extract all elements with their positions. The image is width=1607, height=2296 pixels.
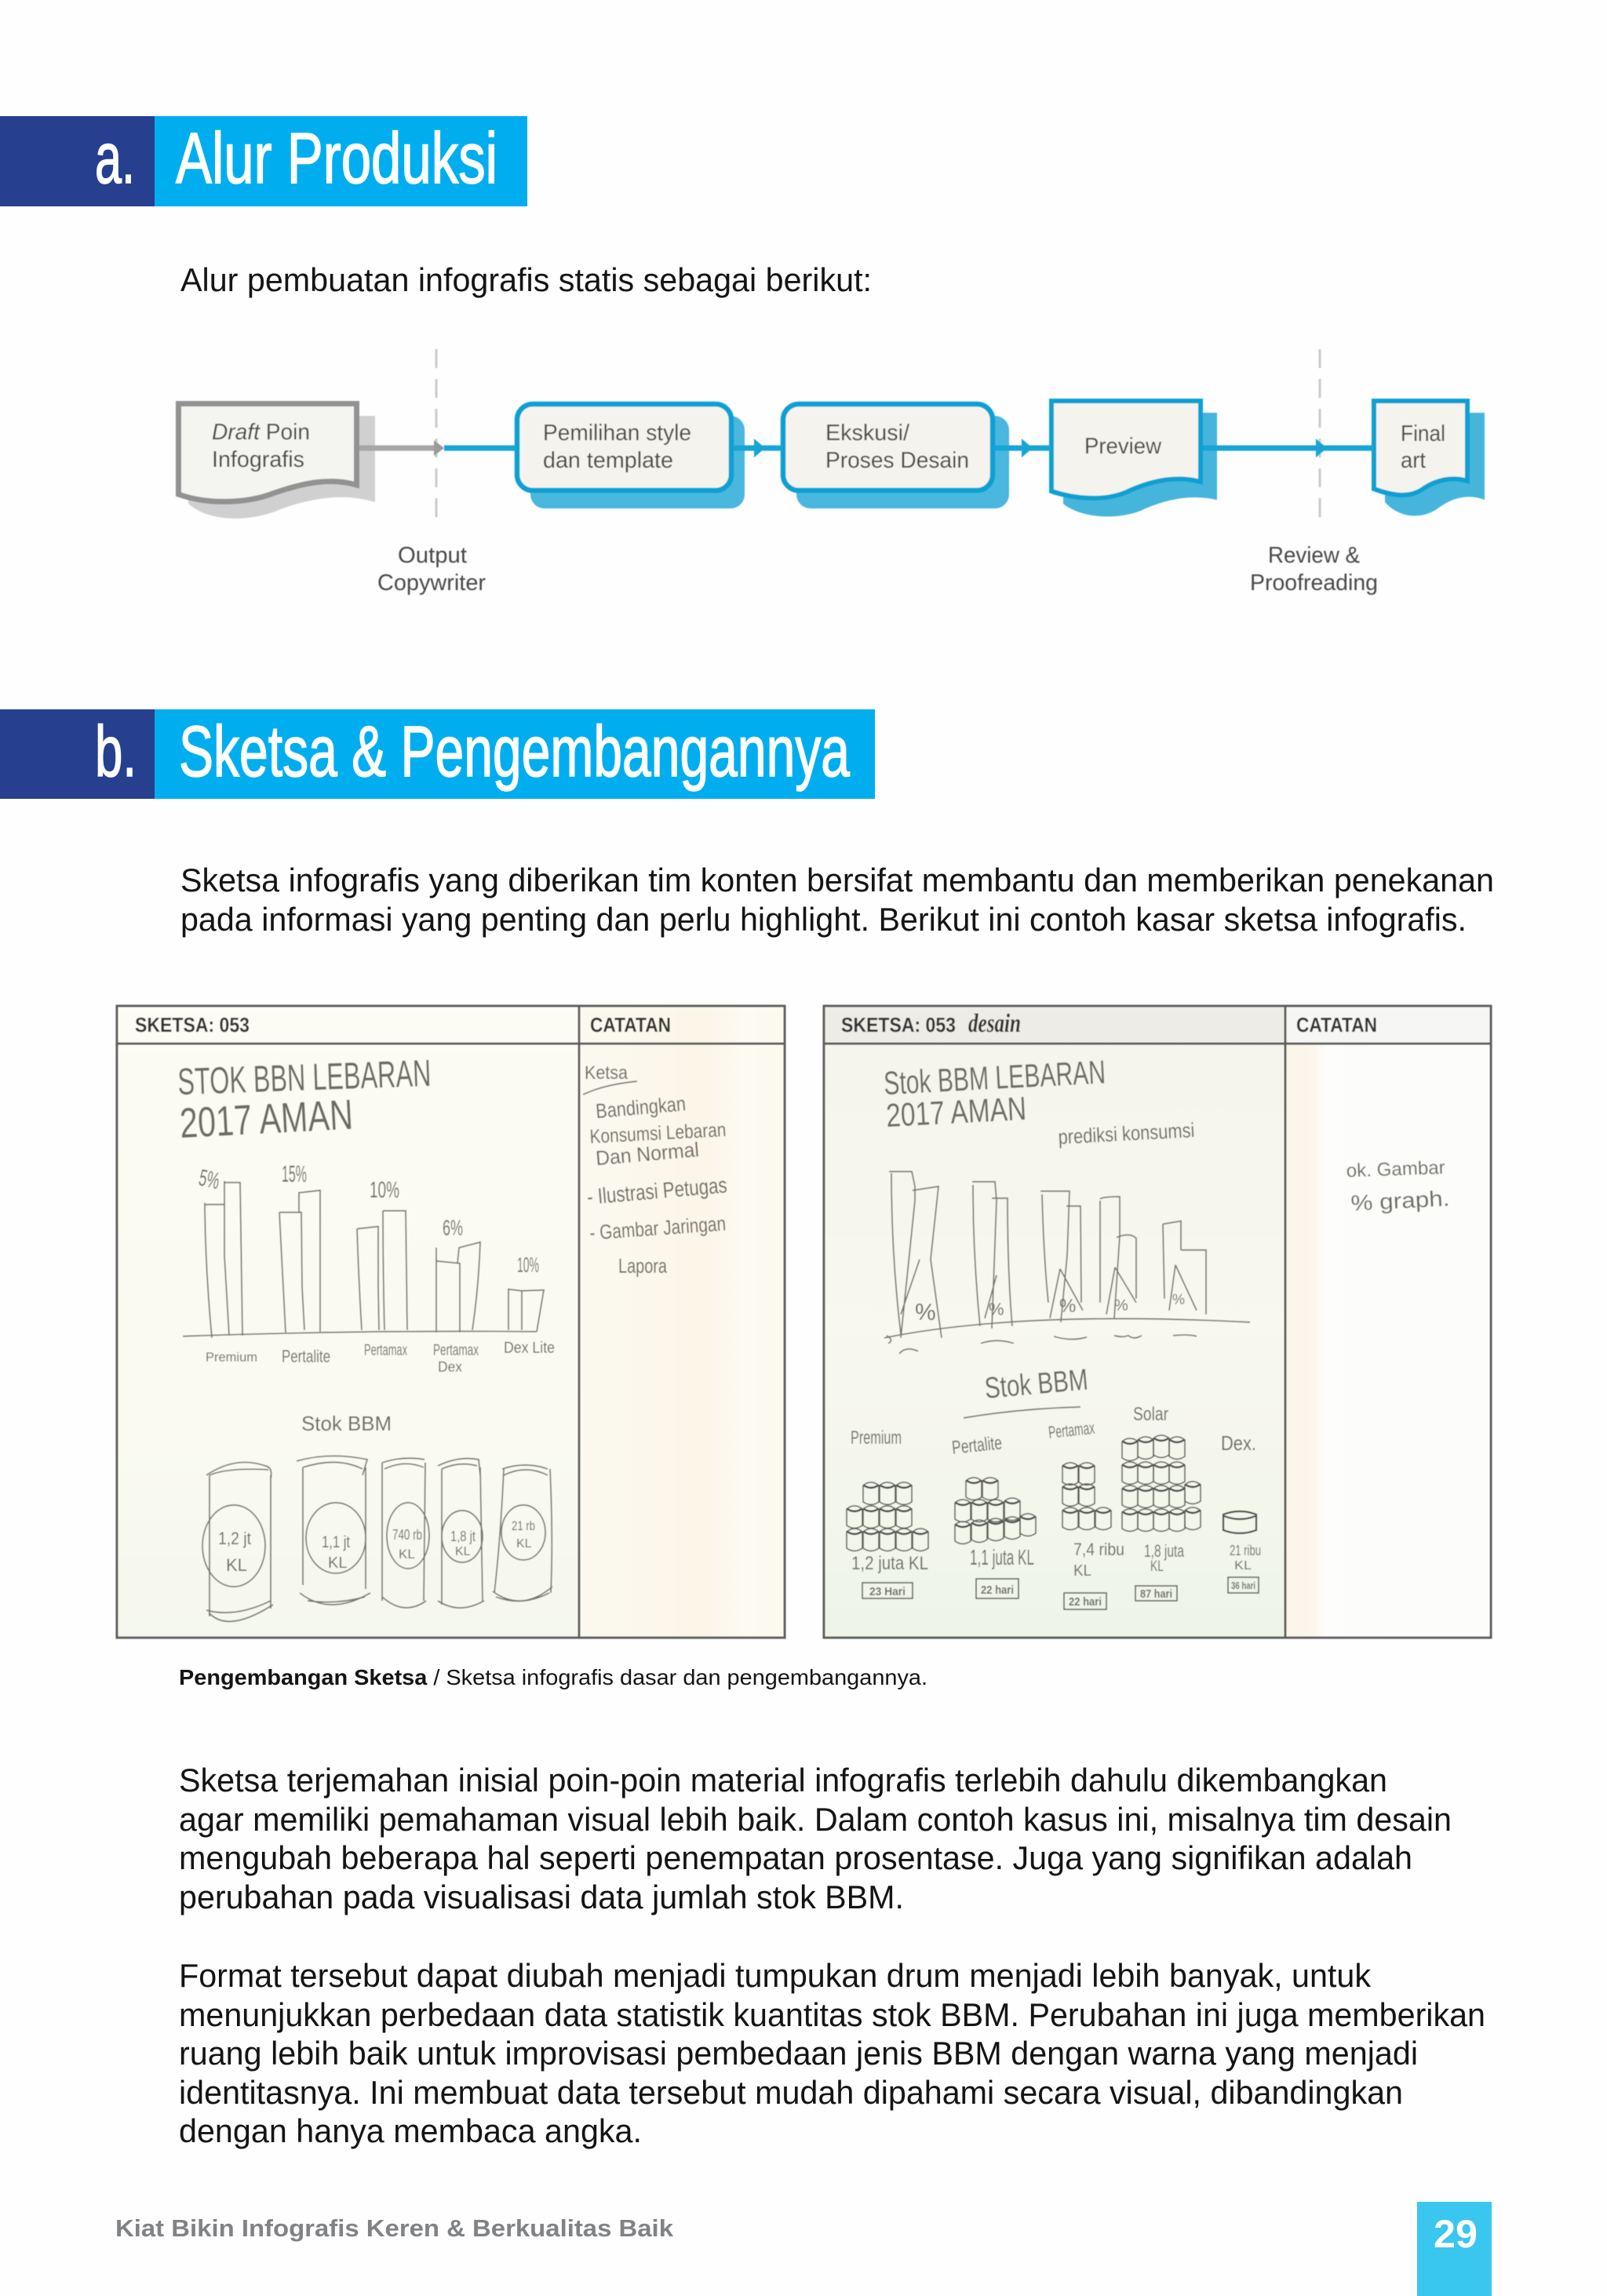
sketch 2 day boxes: 22 hari [981,1584,1014,1597]
label: Output Copywriter [377,543,486,596]
page number tab: 29 [1434,2212,1478,2256]
sketch 2 handwritten title: Stok BBM LEBARAN [883,1053,1106,1102]
paragraph 2: identitasnya. Ini membuat data tersebut mudah dipahami secara visual, dibandingkan [179,2074,1403,2111]
sketch 1 bar chart: 10% [517,1253,539,1277]
sketch 1 big drums: KL [328,1554,347,1572]
footer title: Kiat Bikin Infografis Keren & Berkualitas Baik [115,2214,674,2242]
sketch 2 fuel labels: Pertamax [1048,1418,1095,1442]
sketch 1 notes column [583,1062,728,1277]
section header: a. Alur Produksi [0,116,527,206]
sketch 1 bar chart: 10% [370,1178,399,1203]
sketch 2 drum stack: Premium [847,1482,928,1551]
sketch 2 handwritten subtitle: Stok BBM [983,1364,1089,1405]
sketch 1 bar chart: Pertamax [364,1342,407,1359]
intro text: sketsa: pada informasi yang penting dan perlu highlight. Berikut ini contoh kasar sketsa infografis. [180,901,1467,938]
sketch 1 big drums: 1,2 jt [218,1529,251,1548]
step: Draft Poin Infografis: Infografis [212,447,304,472]
sketch 1 frame [117,1006,785,1638]
sketch 2 quantity labels: 1,1 juta KL [970,1545,1034,1569]
step: Eksekusi / Proses Desain: Proses Desain [825,448,969,473]
sketch 2 header labels [841,1009,1377,1038]
label: Output Copywriter: Output [398,543,467,568]
sketch 2 quantity labels: KL [1073,1562,1091,1580]
sketch 1 handwritten title: STOK BBN LEBARAN [177,1053,432,1103]
step: Eksekusi / Proses Desain: Ekskusi/ [825,421,910,446]
sketch 1 handwritten subtitle: Stok BBM [301,1412,392,1435]
sketch 1: initial sketch [117,1005,785,1638]
sketch 2 fuel labels [851,1404,1256,1459]
sketch 2 bar chart: % [1114,1297,1128,1314]
dashed divider: output copywriter [435,349,438,518]
sketch 1 handwritten title [177,1053,432,1147]
sketch 1 notes column: - Ilustrasi Petugas [586,1172,728,1209]
sketch 2 handwritten title [883,1053,1195,1149]
sketch 1 big drums: 1,1 jt [322,1533,350,1551]
sketch 2 quantity labels: KL [1234,1559,1252,1573]
step: Preview [1051,401,1217,516]
sketch 1 bar chart: Premium [206,1350,257,1365]
sketch 2 day boxes: 23 Hari [869,1585,906,1598]
sketch 1 notes column: Lapora [618,1254,667,1277]
section header: b. Sketsa & Pengembangannya: b. [95,712,137,792]
sketch 1 notes column: Dan Normal [595,1138,700,1170]
connector lines and arrows [359,439,1373,457]
sketch 1 header labels: CATATAN [590,1013,671,1037]
step: Final art: art [1401,448,1426,473]
label: Review & Proofreading: Proofreading [1250,570,1378,596]
paragraph 1: mengubah beberapa hal seperti penempatan prosentase. Juga yang signifikan adalah [179,1839,1412,1876]
sketch 1 bar chart [183,1161,555,1375]
paragraph 2: menunjukkan perbedaan data statistik kuantitas stok BBM. Perubahan ini juga memberikan [179,1996,1485,2033]
sketch 2 handwritten title: 2017 AMAN [885,1090,1027,1134]
sketch 2 handwritten title: prediksi konsumsi [1058,1118,1195,1149]
sketch 1 bar chart: 5% [197,1165,222,1194]
sketch 1 header labels: SKETSA: 053 [135,1013,250,1037]
sketch 1 bar chart: Dex Lite [504,1339,555,1357]
sketch 2 day boxes: 87 hari [1140,1587,1172,1601]
intro text: alur: Alur pembuatan infografis statis sebagai berikut: [180,261,872,298]
sketch 2 quantity labels: 1,8 juta [1144,1541,1185,1561]
section header: a. Alur Produksi: Alur Produksi [176,118,497,199]
label: Review & Proofreading: Review & [1268,543,1360,568]
sketch 1 big drums [202,1456,552,1621]
flow diagram [179,349,1485,596]
paragraph 2: Format tersebut dapat diubah menjadi tumpukan drum menjadi lebih banyak, untuk [179,1957,1372,1994]
step: Pemilihan style dan template: Pemilihan style [543,421,691,446]
sketch 2 fuel labels: Dex. [1221,1431,1256,1455]
sketch 1 big drums: 1,8 jt [450,1529,476,1544]
paragraph 2: dengan hanya membaca angka. [179,2112,642,2149]
intro text: sketsa [180,862,1494,938]
step: Preview: Preview [1084,434,1162,459]
step: Final art [1374,401,1485,516]
sketch 2 drum stack: Solar [1122,1435,1201,1532]
sketch 2 day boxes: 36 hari [1231,1580,1255,1591]
sketch 1 big drums: KL [516,1537,532,1551]
dashed divider: review [1318,349,1321,518]
sketch 1 big drums: KL [455,1545,471,1558]
sketch 1 bar chart: Pertamax [433,1342,479,1359]
paragraph 2: ruang lebih baik untuk improvisasi pembedaan jenis BBM dengan warna yang menjadi [179,2035,1418,2072]
step: Eksekusi / Proses Desain [783,404,1009,508]
sketch 2: developed sketch [824,1005,1491,1638]
paragraph 1: perubahan pada visualisasi data jumlah stok BBM. [179,1879,904,1915]
section header: b. Sketsa & Pengembangannya [0,709,875,799]
section header: b. Sketsa & Pengembangannya: Sketsa & Pengembangannya [179,712,851,792]
sketch 2 drum stack: Dex [1223,1511,1256,1533]
sketch 1 big drums: KL [226,1555,247,1575]
sketch 2 quantity labels: 1,2 juta KL [851,1553,928,1574]
label: Output Copywriter: Copywriter [377,570,486,596]
sketch 2 quantity labels: 7,4 ribu [1073,1540,1124,1559]
sketch 1 notes column: Konsumsi Lebaran [589,1119,727,1148]
step: Pemilihan style dan template: dan template [543,448,673,473]
sketch 2 bar chart [884,1172,1250,1354]
sketch 2 notes: % graph. [1350,1186,1450,1215]
step: Final art: Final [1401,421,1445,446]
paragraph 1 [179,1762,1452,1915]
step: Pemilihan style dan template [517,404,745,508]
sketch 2 bar chart: % [989,1299,1004,1319]
sketch 2 drum stack: Pertalite [955,1478,1036,1544]
sketch 1 bar chart: Dex [438,1359,462,1375]
sketch 2 notes: ok. Gambar [1346,1157,1445,1182]
sketch 2 header labels: CATATAN [1296,1013,1377,1037]
sketch 1 notes column: Ketsa [585,1062,629,1084]
sketch 1 bar chart: 6% [443,1215,463,1240]
paragraph 1: Sketsa terjemahan inisial poin-poin material infografis terlebih dahulu dikembangkan [179,1762,1387,1799]
sketch 2 quantity labels [851,1540,1261,1580]
sketch 2 quantity labels: KL [1150,1558,1164,1575]
step: Draft Poin Infografis: Draft Poin [212,420,310,445]
sketch 2 fuel labels: Pertalite [951,1432,1003,1459]
sketch 2 fuel labels: Premium [851,1427,902,1449]
sketch 2 header labels: desain [968,1009,1021,1038]
sketch 1 big drums: KL [399,1547,415,1562]
sketch 2 day boxes: 22 hari [1069,1595,1102,1609]
sketch 1 bar chart: Pertalite [282,1347,330,1366]
sketch 2 header labels: SKETSA: 053 [841,1013,956,1037]
sketch 1 bar chart: 15% [282,1161,307,1187]
sketch 1 big drums: 740 rb [392,1527,422,1543]
sketch 2 notes [1346,1157,1450,1215]
step: Draft Poin Infografis [179,403,375,519]
sketch 2 quantity labels: 21 ribu [1230,1543,1261,1558]
sketch 1 handwritten title: 2017 AMAN [178,1091,354,1147]
sketch 2 frame [824,1006,1491,1638]
paragraph 2 [179,1957,1485,2149]
sketch 1 header labels [135,1013,671,1037]
caption: Pengembangan Sketsa / Sketsa infografis dasar dan pengembangannya. [179,1665,927,1689]
sketch 2 day boxes [862,1577,1259,1609]
sketch 2 drum stack: Pertamax [1062,1463,1111,1530]
paragraph 1: agar memiliki pemahaman visual lebih baik. Dalam contoh kasus ini, misalnya tim desain [179,1801,1452,1838]
sketch 2 bar chart: % [1172,1292,1185,1307]
intro text: sketsa: Sketsa infografis yang diberikan tim konten bersifat membantu dan memberikan penekanan [180,862,1494,898]
page number tab [1417,2202,1492,2296]
sketch 2 bar chart: % [915,1299,936,1325]
sketch 2 fuel labels: Solar [1133,1404,1168,1425]
sketch 1 notes column: Bandingkan [595,1092,687,1123]
label: Review & Proofreading [1250,543,1378,596]
sketch 2 handwritten subtitle [964,1364,1089,1418]
sketch 2 bar chart: % [1059,1296,1076,1317]
section header: a. Alur Produksi: a. [95,118,135,199]
sketch 1 big drums: 21 rb [512,1518,535,1533]
sketch 1 notes column: - Gambar Jaringan [589,1212,727,1245]
